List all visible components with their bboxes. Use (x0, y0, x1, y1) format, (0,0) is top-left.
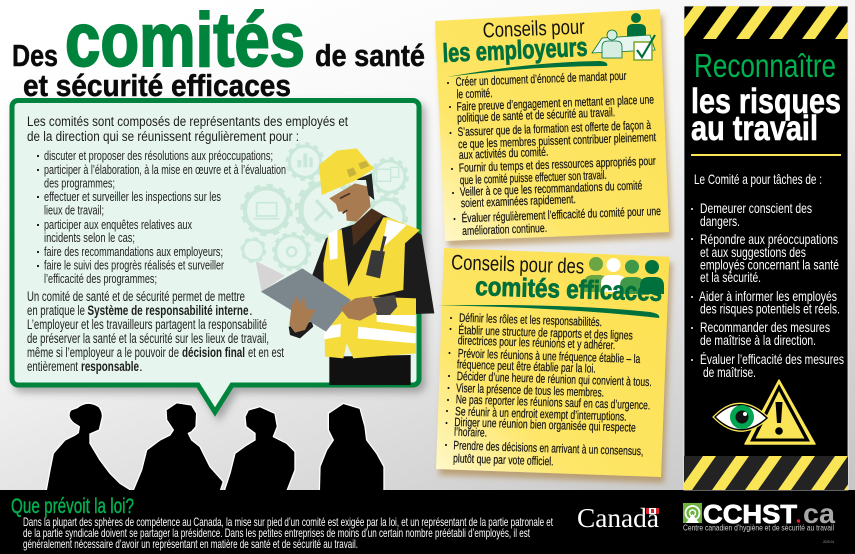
title: Des (12, 38, 58, 73)
text: internal responsibility system: entièrement (27, 359, 78, 374)
text: legal requirements: généralement nécessaire d’avoir un représentant en matière de santé et de sécurité au travail. (23, 538, 358, 551)
list: employer tips: aux activités du comité. (459, 145, 549, 162)
list: employer tips: que le comité puisse effectuer son travail. (460, 168, 607, 187)
face (329, 183, 371, 222)
list: employer tips: Veiller à ce que les recommandations du comité (460, 178, 643, 199)
list: employer tips: politique de santé et de sécurité au travail. (457, 105, 615, 125)
text: committee introduction: de la direction qui se réunissent régulièrement pour : (27, 129, 299, 144)
swoosh (437, 305, 659, 318)
worker reflective vest (323, 217, 420, 358)
logo: CCHST: ca (803, 498, 835, 529)
hazard stripes: top (684, 6, 848, 39)
text: internal responsibility system: décision final (182, 345, 245, 360)
list: committee tasks: et la sécurité. (700, 269, 761, 285)
hard hat patches (347, 161, 369, 177)
list: committee duties: discuter et proposer des résolutions aux préoccupations; (44, 148, 273, 163)
panel background (684, 6, 848, 490)
list: effective committee tips: Se réunir à un endroit exempt d’interruptions. (455, 404, 627, 424)
list: committee duties: effectuer et surveiller les inspections sur les (44, 189, 221, 204)
swoosh (447, 61, 607, 77)
worker trousers (329, 355, 411, 385)
icon: people at table with check mark (592, 13, 655, 60)
text: committee introduction (27, 114, 348, 144)
list: effective committee tips: plutôt que par vote officiel. (453, 451, 554, 468)
silhouette: woman with bun (46, 403, 133, 492)
text: legal requirements: de la partie syndicale doivent se partager la présidence. Dans les petites entreprises de moins d’un certain nombre préétabli d’employés, il est (23, 527, 531, 540)
text: committee introduction: Les comités sont composés de représentants des employés et (27, 114, 348, 129)
note paper (435, 9, 669, 241)
list: employer tips: ce que les membres puissent contribuer pleinement (458, 130, 657, 151)
heading: what the law says: Que prévoit la loi? (11, 495, 134, 518)
hair (355, 173, 374, 200)
text: legal requirements: Dans la plupart des sphères de compétence au Canada, la mise sur pied d’un comité est exigée par la loi, et un représentant de la partie patronale et (23, 516, 554, 529)
text: internal responsibility system (27, 289, 284, 374)
list: committee duties: faire des recommandations aux employeurs; (44, 244, 223, 259)
left cuff (289, 322, 313, 338)
logo: Canada wordmark: Canada (577, 503, 659, 533)
list: effective committee tips: Ne pas reporter les réunions sauf en cas d’urgence. (456, 392, 650, 412)
illustration: worker reading clipboard (256, 148, 434, 385)
divider line (691, 154, 841, 156)
list: effective committee tips: Prendre des décisions en arrivant à un consensus, (453, 438, 644, 458)
eye and mouth (340, 193, 350, 213)
panel: employer tips note (435, 9, 669, 241)
text: internal responsibility system: L’employeur et les travailleurs partagent la responsabilité (27, 317, 267, 332)
list: effective committee tips (445, 311, 652, 468)
text: internal responsibility system: responsable (81, 359, 139, 374)
hazard stripes: bottom (679, 456, 855, 490)
worker black shirt and sleeves (312, 215, 434, 317)
list: committee tasks: dangers. (700, 213, 740, 229)
text: internal responsibility system: de préserver la santé et la sécurité sur les lieux de travail, (27, 331, 269, 346)
list: effective committee tips: Décider d’une heure de réunion qui convient à tous. (457, 369, 652, 389)
list: employer tips: Fournir du temps et des ressources appropriés pour (459, 154, 656, 175)
panel: effective committee tips note (436, 248, 669, 477)
wordmark: CCHST (703, 499, 797, 529)
left hand (289, 296, 315, 333)
title: et sécurité efficaces (23, 68, 291, 103)
footer band (0, 490, 855, 554)
title: de santé (315, 38, 425, 73)
list: employer tips: le comité. (456, 86, 493, 101)
list: employer tips: amélioration continue. (462, 221, 547, 238)
note paper (436, 248, 669, 477)
list: employer tips: S’assurer que de la formation est offerte de façon à (457, 118, 651, 139)
list: committee duties: faire le suivi des progrès réalisés et surveiller (44, 258, 224, 272)
list: effective committee tips: fréquence peut être établie par la loi. (457, 357, 596, 376)
list: committee tasks (691, 200, 844, 380)
hard hat (319, 148, 374, 195)
heading: employer tips: les employeurs (442, 32, 588, 68)
list: employer tips (447, 69, 661, 238)
text: legal requirements (23, 516, 554, 551)
list: committee duties: des programmes; (44, 176, 115, 190)
panel: committee speech bubble (12, 100, 419, 412)
text: internal responsibility system: même si l’employeur a le pouvoir de (27, 345, 179, 360)
neck (352, 208, 383, 246)
list: committee tasks: de maîtrise à la direction. (700, 332, 816, 348)
list: committee tasks: de maîtrise. (703, 364, 756, 380)
list: committee duties (37, 148, 286, 286)
heading: effective committee tips (451, 251, 663, 307)
heading: employer tips: Conseils pour (482, 16, 585, 42)
list: committee duties: participer à l’élaboration, à la mise en œuvre et à l’évaluation (44, 162, 286, 177)
list: effective committee tips: Prévoir les réunions à une fréquence établie – la (458, 346, 641, 366)
list: employer tips: soient examinées rapidement. (461, 192, 576, 210)
radio (366, 236, 387, 278)
list: committee duties: incidents selon le cas; (44, 230, 135, 245)
text: internal responsibility system: Système de responsabilité interne (88, 303, 249, 318)
text: internal responsibility system: Un comité de santé et de sécurité permet de mettre (27, 289, 245, 304)
text: internal responsibility system: en pratique le (27, 303, 85, 318)
list: employer tips: Faire preuve d’engagement en mettant en place une (456, 92, 654, 114)
silhouette: man right (224, 407, 295, 492)
heading: effective committee tips: comités efficaces (475, 271, 663, 307)
list: employer tips: Évaluer régulièrement l’efficacité du comité pour une (461, 203, 661, 225)
list: effective committee tips: Viser la présence de tous les membres. (456, 381, 604, 400)
logo: CCHST (683, 498, 835, 544)
list: committee duties: participer aux enquêtes relatives aux (44, 217, 192, 232)
heading: workplace hazards: au travail (691, 109, 818, 148)
text: internal responsibility system: et en est (248, 345, 284, 360)
right hand (340, 296, 377, 321)
list: committee duties: lieux de travail; (44, 202, 104, 218)
heading: employer tips (442, 16, 588, 68)
clipboard (261, 268, 351, 332)
list: committee tasks: et aux suggestions des (700, 244, 806, 260)
title (12, 0, 425, 103)
icon: eye (715, 405, 767, 430)
list: committee duties: l’efficacité des programmes; (44, 271, 157, 286)
logo: CCHST: 2025-04 (823, 539, 835, 544)
list: effective committee tips: Définir les rôles et les responsabilités. (459, 311, 602, 329)
list: effective committee tips: Établir une structure de rapports et des lignes (458, 322, 633, 342)
panel: recognizing workplace hazards (684, 6, 848, 490)
list: employer tips: Créer un document d’énoncé de mandat pour (455, 69, 627, 89)
title: comités (65, 0, 305, 83)
list: effective committee tips: l’horaire. (454, 425, 487, 440)
list: committee tasks: Demeurer conscient des (700, 200, 812, 216)
gears illustration (241, 144, 407, 270)
heading: workplace hazards (691, 82, 841, 148)
logo mark (683, 503, 702, 523)
list: effective committee tips: directrices pour les réunions et y adhérer. (458, 333, 615, 352)
vest reflective strips (324, 219, 416, 343)
icon: four people (584, 257, 664, 294)
icon: warning triangle (745, 380, 815, 444)
silhouette: woman long hair (319, 403, 384, 492)
arm shadow (372, 295, 397, 315)
text: internal responsibility system: . (249, 303, 253, 318)
silhouette: man left (133, 403, 223, 492)
heading: effective committee tips: Conseils pour des (451, 251, 584, 278)
white page (256, 261, 285, 292)
list: effective committee tips: Diriger une réunion bien organisée qui respecte (454, 415, 636, 435)
silhouettes: four people in meeting (46, 403, 384, 492)
text: internal responsibility system: . (139, 359, 143, 374)
